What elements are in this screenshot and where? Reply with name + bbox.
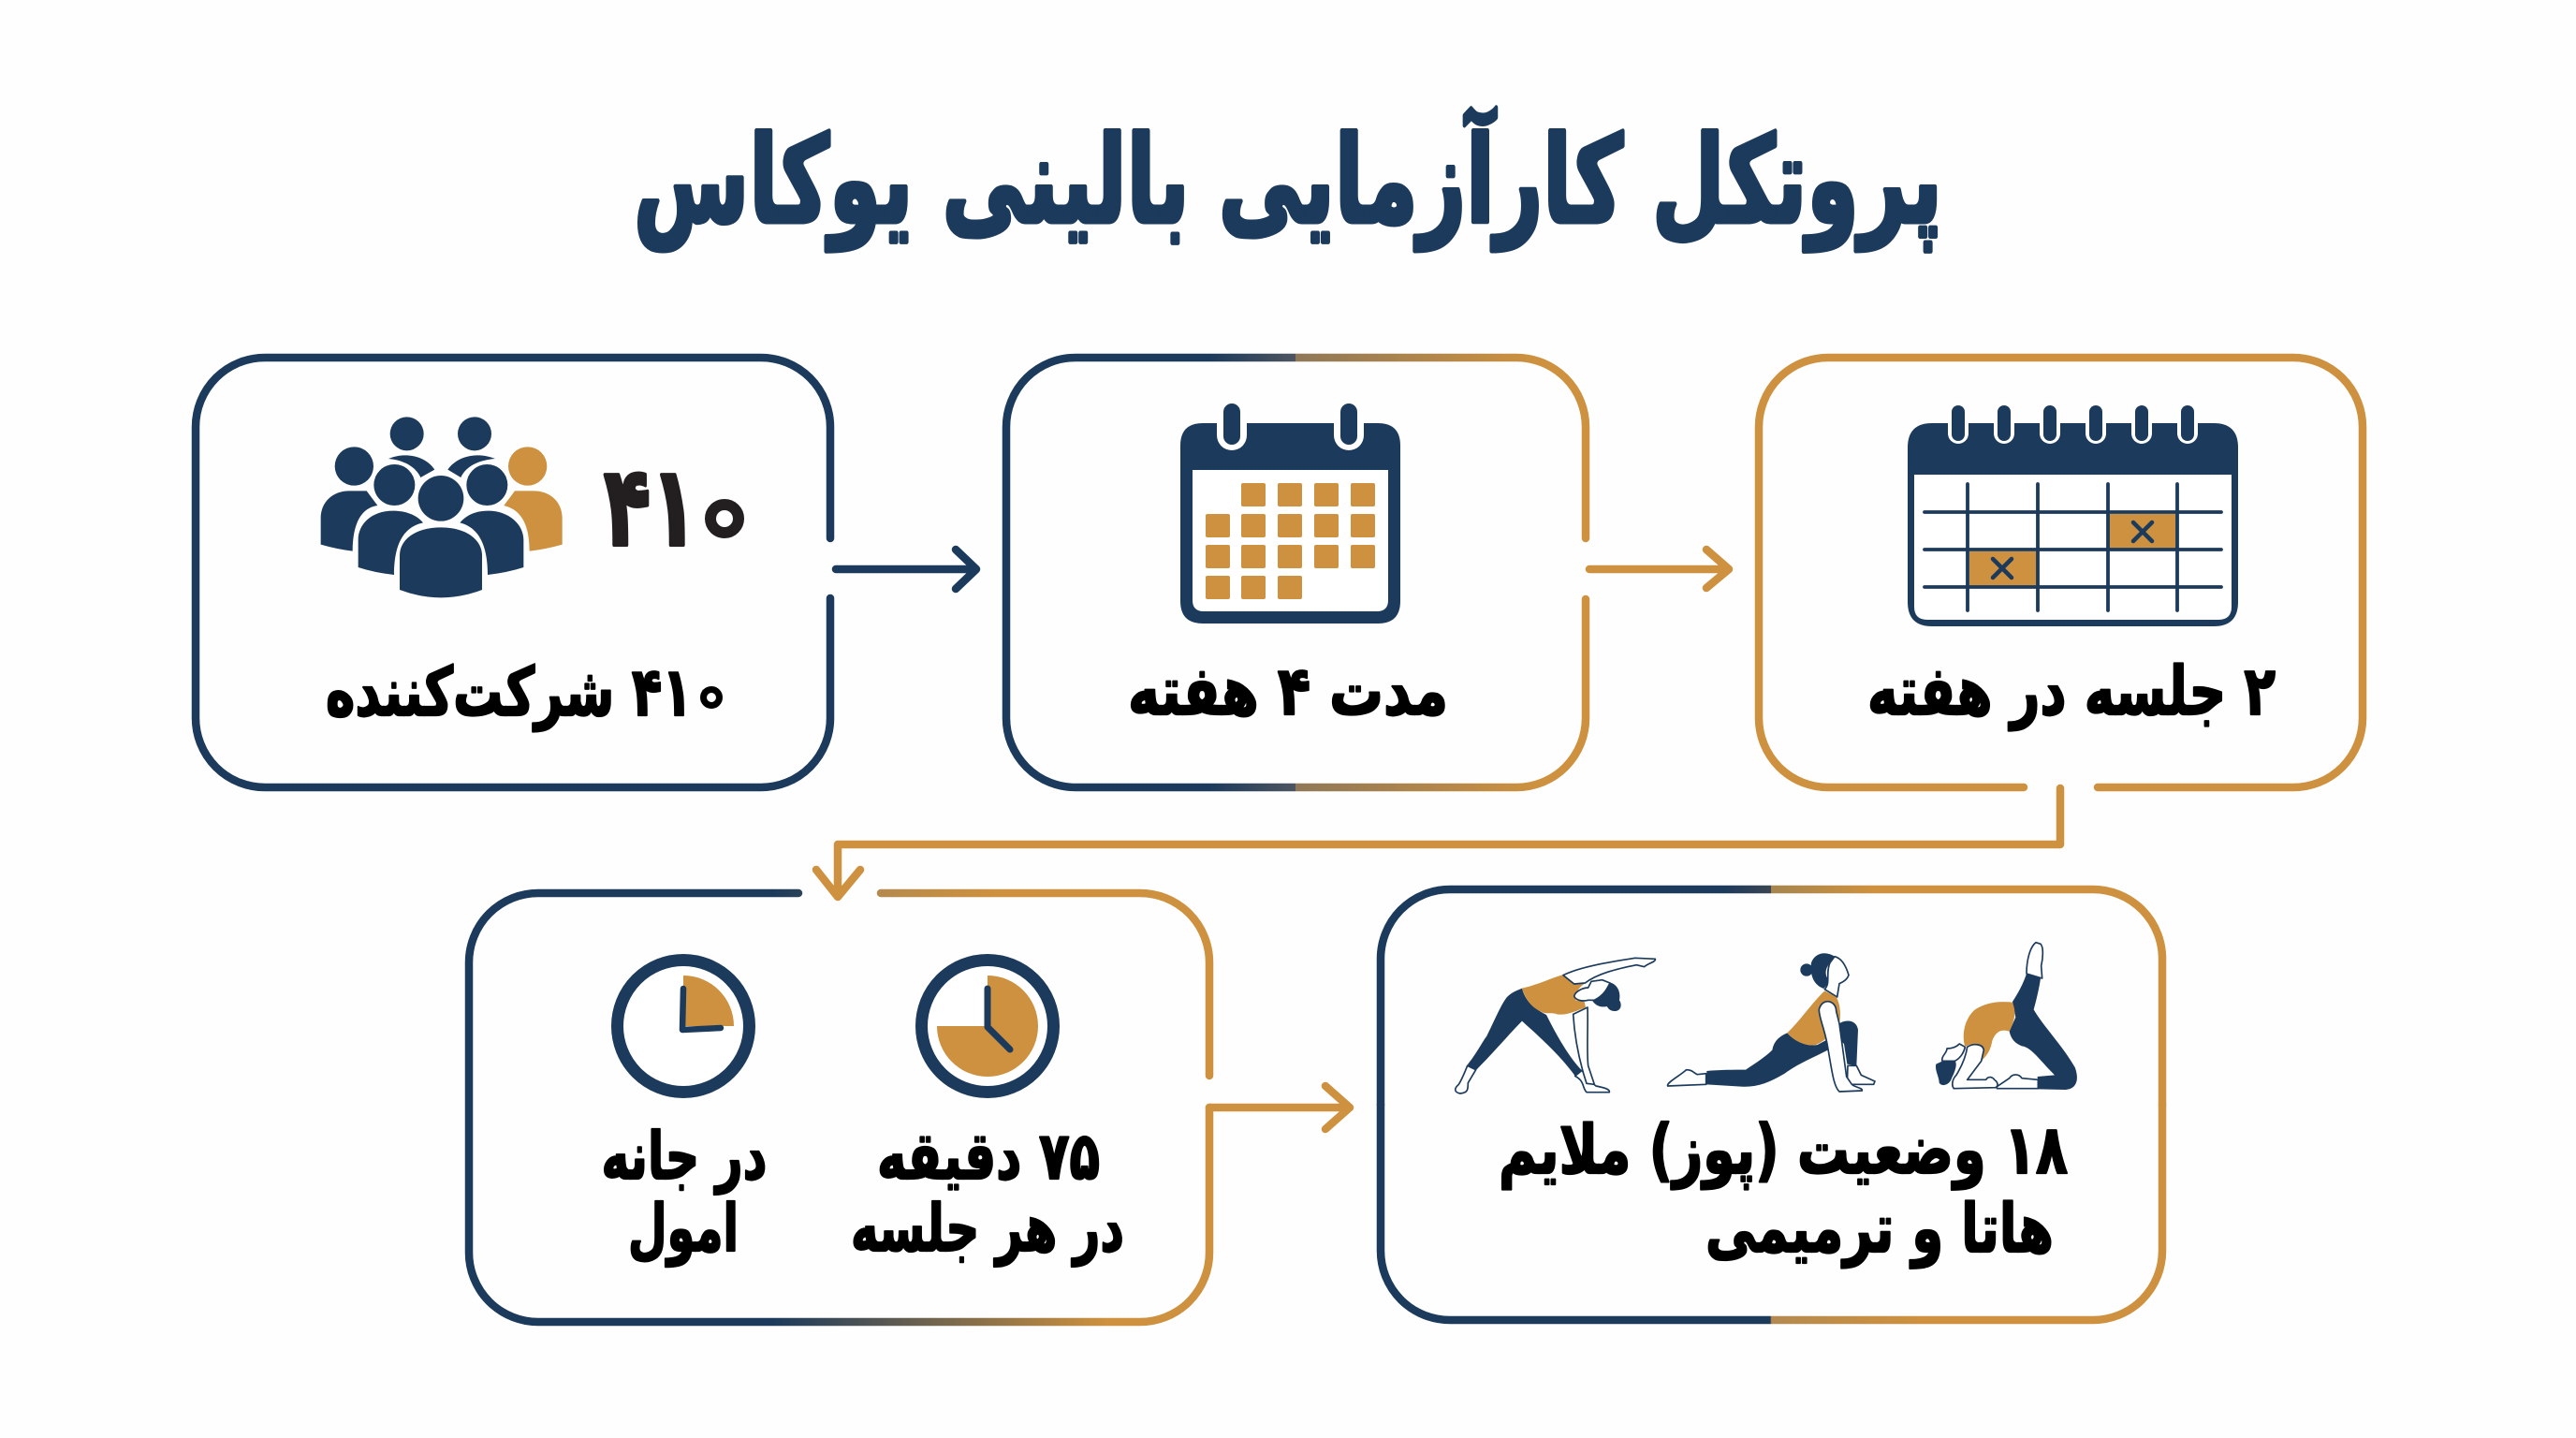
label: frequency: ۲ جلسه در هفته [1867, 652, 2276, 731]
arrow: duration to frequency [1589, 550, 1729, 588]
label: 75 minutes per session: در هر جلسه [851, 1190, 1124, 1267]
big number 410 [604, 442, 744, 571]
label: in first rank: در جانه [601, 1118, 768, 1195]
arrow: session to poses [1209, 1086, 1350, 1129]
label: poses: هاتا و ترمیمی [1705, 1189, 2054, 1269]
icon: group of people [321, 417, 563, 597]
title: پروتکل کارآزمایی بالینی یوکاس [634, 107, 1942, 252]
arrow: participants to duration [836, 550, 976, 589]
icon: clock 75 minutes [921, 961, 1054, 1092]
panel border: poses top [1381, 889, 2162, 1105]
panel: participants [196, 358, 830, 787]
panel border: poses bottom [1381, 1105, 2162, 1320]
panel border: session length top right [881, 893, 1209, 1076]
panel border: frequency [1759, 358, 2363, 787]
panel: poses [1381, 889, 2162, 1320]
label: participants: ۴۱۰ شرکت‌کننده [326, 653, 723, 732]
icon: triangle pose [1456, 958, 1655, 1093]
icon: pigeon backbend pose [1936, 943, 2077, 1090]
label: duration: مدت ۴ هفته [1128, 652, 1448, 730]
label: in first rank [601, 1118, 768, 1267]
panel: session length [469, 893, 1209, 1322]
icon: low lunge pose [1668, 953, 1875, 1092]
icon: clock first quarter [618, 961, 749, 1092]
icon: monthly calendar [1180, 404, 1400, 624]
arrow: frequency to session [816, 788, 2060, 897]
big number 410: ۴۱۰ [604, 442, 744, 571]
panel: frequency [1759, 358, 2363, 787]
label: poses [1499, 1110, 2068, 1269]
label: 75 minutes per session: ۷۵ دقیقه [877, 1118, 1100, 1195]
icon: weekly schedule calendar [1908, 403, 2238, 626]
label: poses: ۱۸ وضعیت (پوز) ملایم [1499, 1110, 2068, 1190]
panel: duration [1006, 358, 1586, 787]
label: in first rank: امول [628, 1190, 739, 1267]
label: 75 minutes per session [851, 1118, 1124, 1267]
panel border: session length [469, 893, 1209, 1322]
panel border: participants [196, 358, 830, 787]
panel border: duration [1006, 358, 1586, 787]
